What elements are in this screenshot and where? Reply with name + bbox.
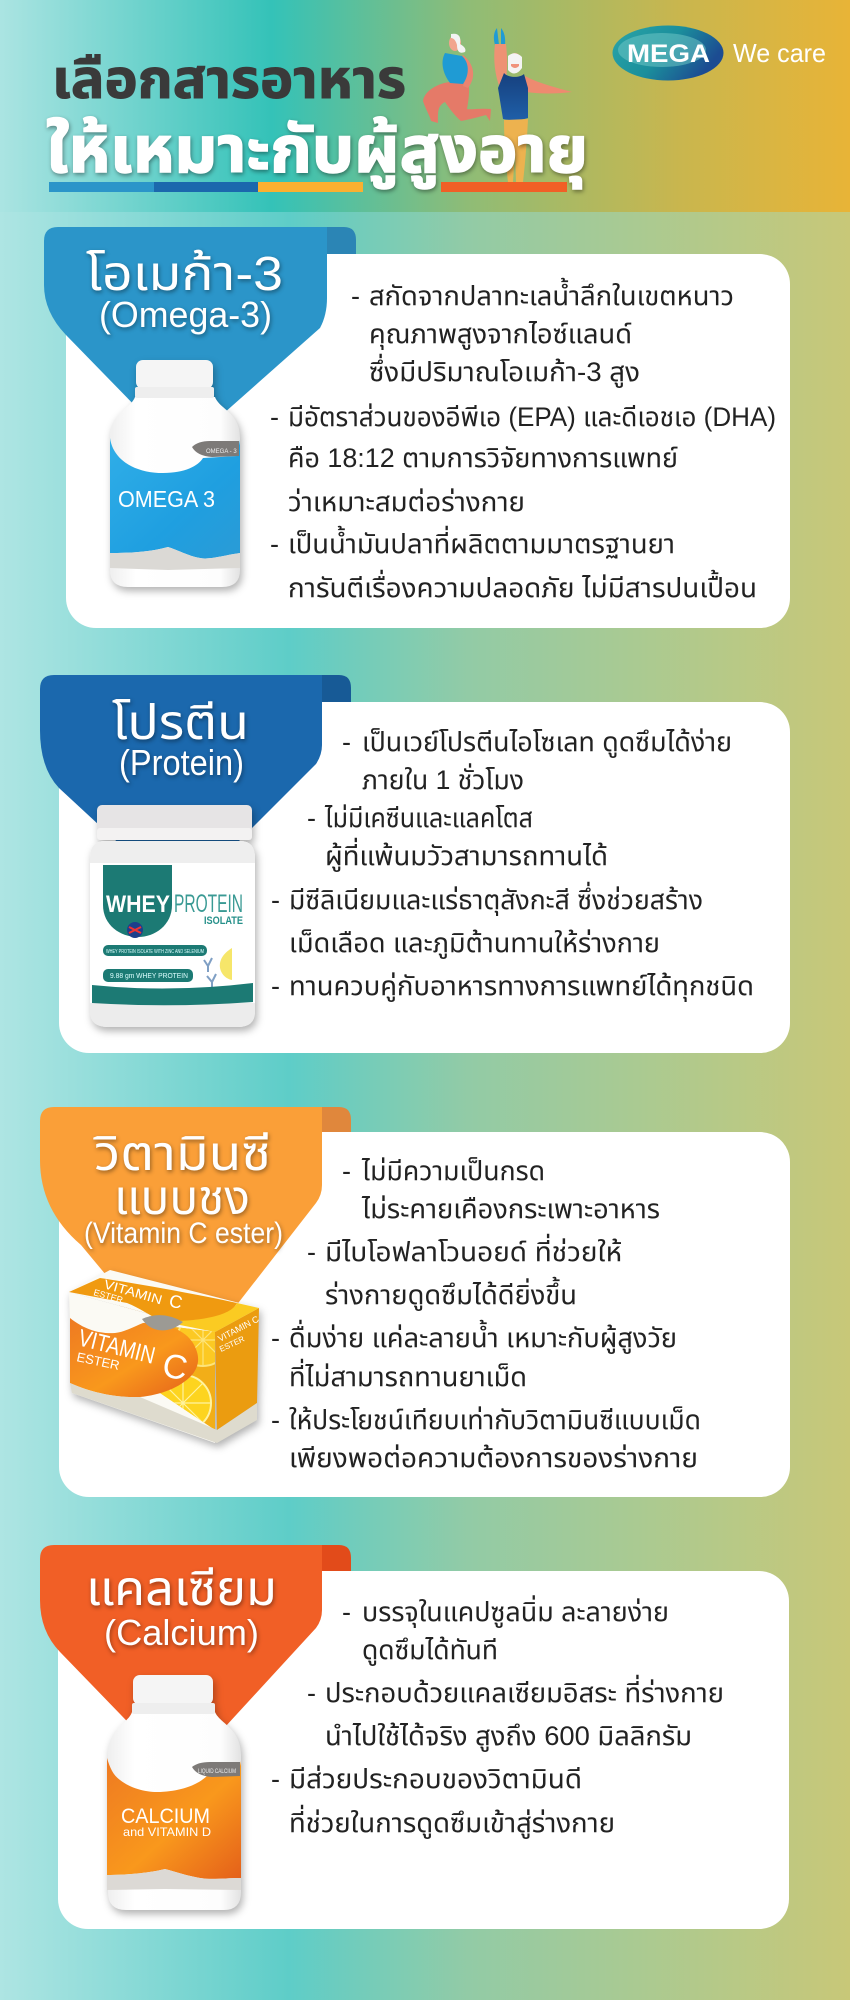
heading — [84, 1128, 283, 1250]
bullet text: ดูดซึมได้ทันที — [362, 1635, 498, 1666]
bullet text: คือ 18:12 ตามการวิจัยทางการแพทย์ — [288, 443, 678, 473]
bullet text: ประกอบด้วยแคลเซียมอิสระ ที่ร่างกาย — [325, 1674, 724, 1708]
bullet text — [271, 727, 754, 1002]
bullet text: - — [270, 529, 279, 559]
panel: protein — [40, 675, 790, 1053]
bullet text: มีส่วยประกอบของวิตามินดี — [289, 1764, 582, 1794]
product: calcium bottle — [107, 1675, 241, 1910]
product: vitamin c box: ESTER — [92, 1287, 125, 1305]
bullet text: - — [342, 1597, 351, 1627]
tab shape — [40, 1545, 322, 1776]
product: whey protein jar — [90, 805, 255, 1027]
bullet text: - — [342, 1156, 351, 1186]
bullet text: - — [307, 1237, 316, 1267]
bullet text: การันตีเรื่องความปลอดภัย ไม่มีสารปนเปื้อน — [288, 569, 757, 603]
heading: วิตามินซี — [93, 1128, 271, 1181]
bullet text: - — [271, 1764, 280, 1794]
product: whey protein jar: WHEY — [106, 891, 170, 918]
figure: man with dumbbell — [494, 28, 572, 182]
tab shape — [44, 227, 327, 452]
panel: calcium — [40, 1545, 789, 1929]
product: omega 3 bottle — [110, 360, 240, 587]
bullet text: มีไบโอฟลาโวนอยด์ ที่ช่วยให้ — [325, 1233, 622, 1267]
panel: vitamin c ester — [40, 1107, 790, 1497]
bullet text: - — [271, 1323, 280, 1353]
product: vitamin c box: C — [167, 1290, 184, 1313]
heading: (Vitamin C ester) — [84, 1217, 283, 1250]
tab shape — [40, 1107, 322, 1320]
heading: โอเมก้า-3 — [86, 248, 283, 301]
bullet text: ร่างกายดูดซึมได้ดียิ่งขึ้น — [325, 1276, 577, 1311]
logo: MEGA We care: MEGA — [627, 40, 710, 68]
heading: โปรตีน — [112, 697, 249, 750]
bullet text — [270, 277, 776, 603]
bullet text — [271, 1156, 701, 1473]
bullet text: ที่ช่วยในการดูดซึมเข้าสู่ร่างกาย — [289, 1804, 615, 1839]
product: vitamin c box: ESTER — [218, 1334, 246, 1354]
bullet text: เพียงพอต่อความต้องการของร่างกาย — [289, 1443, 698, 1473]
bullet text: ว่าเหมาะสมต่อร่างกาย — [288, 487, 525, 517]
tab shape — [40, 675, 322, 900]
card — [59, 702, 790, 1053]
heading — [86, 248, 283, 335]
bullet text: คุณภาพสูงจากไอซ์แลนด์ — [369, 319, 632, 350]
bullet text: - — [307, 803, 316, 833]
bullet text: ไม่มีเคซีนและแลคโตส — [324, 803, 533, 833]
product: whey protein jar: ISOLATE — [204, 915, 243, 927]
card — [66, 254, 790, 628]
heading: (Calcium) — [104, 1612, 259, 1653]
product: vitamin c box: VITAMIN — [102, 1276, 164, 1307]
card — [58, 1571, 789, 1929]
tab fold — [315, 1107, 351, 1132]
bullet text: - — [342, 727, 351, 757]
heading: (Omega-3) — [99, 294, 272, 335]
figure: woman lunging — [423, 34, 491, 123]
product: whey protein jar: PROTEIN — [174, 890, 243, 918]
bullet text: - — [351, 281, 360, 311]
heading: แบบชง — [114, 1172, 250, 1225]
product: omega 3 bottle: OMEGA - 3 — [206, 449, 237, 455]
bullet text: - — [271, 885, 280, 915]
panel: omega-3 — [44, 227, 790, 628]
tab fold — [315, 1545, 351, 1571]
logo: MEGA We care — [612, 26, 826, 80]
illustration: exercising seniors — [423, 28, 572, 182]
tab fold — [320, 227, 356, 254]
heading: แคลเซียม — [86, 1563, 277, 1616]
heading: (Protein) — [119, 742, 244, 783]
bullet text: ที่ไม่สามารถทานยาเม็ด — [289, 1358, 527, 1392]
product: whey protein jar: 9.88 gm WHEY PROTEIN — [110, 973, 188, 980]
bullet text: เป็นเวย์โปรตีนไอโซเลท ดูดซึมได้ง่าย — [362, 727, 732, 758]
bullet text: เป็นน้ำมันปลาที่ผลิตตามมาตรฐานยา — [288, 525, 675, 559]
bullet text — [271, 1595, 724, 1839]
bullet text: ผู้ที่แพ้นมวัวสามารถทานได้ — [325, 837, 608, 872]
title line 1: เลือกสารอาหาร — [52, 50, 406, 110]
bullet text: เม็ดเลือด และภูมิต้านทานให้ร่างกาย — [289, 928, 660, 959]
product: calcium bottle: LIQUID CALCIUM — [198, 1769, 236, 1775]
product: calcium bottle: CALCIUM — [121, 1805, 210, 1828]
bullet text: ภายใน 1 ชั่วโมง — [362, 763, 524, 795]
product: calcium bottle: and VITAMIN D — [123, 1825, 211, 1839]
bullet text: ทานควบคู่กับอาหารทางการแพทย์ได้ทุกชนิด — [289, 971, 754, 1002]
bullet text: นำไปใช้ได้จริง สูงถึง 600 มิลลิกรัม — [325, 1721, 692, 1752]
product: vitamin c box — [69, 1270, 261, 1443]
bullet text: - — [270, 402, 279, 432]
product: vitamin c box: VITAMIN — [76, 1325, 158, 1370]
title line 2: ให้เหมาะกับผู้สูงอายุ — [46, 113, 588, 189]
product: vitamin c box: VITAMIN C — [216, 1314, 261, 1344]
bullet text: ดื่มง่าย แค่ละลายน้ำ เหมาะกับผู้สูงวัย — [289, 1319, 677, 1354]
bullet text: บรรจุในแคปซูลนิ่ม ละลายง่าย — [362, 1595, 669, 1628]
bullet text: สกัดจากปลาทะเลน้ำลึกในเขตหนาว — [369, 277, 734, 311]
product: whey protein jar: WHEY PROTEIN ISOLATE WITH ZINC AND SELENIUM — [106, 949, 204, 955]
logo: MEGA We care: We care — [733, 38, 826, 68]
bullet text: ให้ประโยชน์เทียบเท่ากับวิตามินซีแบบเม็ด — [289, 1405, 701, 1435]
product: omega 3 bottle: OMEGA 3 — [118, 486, 215, 512]
product: vitamin c box: ESTER — [75, 1349, 121, 1373]
card — [59, 1132, 790, 1497]
heading — [112, 697, 249, 783]
header band — [0, 0, 850, 212]
bullet text: ซึ่งมีปริมาณโอเมก้า-3 สูง — [369, 353, 640, 388]
bullet text: มีอัตราส่วนของอีพีเอ (EPA) และดีเอชเอ (DHA) — [288, 402, 776, 432]
heading — [86, 1563, 277, 1653]
bullet text: ไม่มีความเป็นกรด — [361, 1156, 545, 1186]
bullet text: - — [307, 1678, 316, 1708]
tab fold — [315, 675, 351, 702]
bullet text: - — [271, 1405, 280, 1435]
bullet text: - — [271, 971, 280, 1001]
bullet text: มีซีลิเนียมและแร่ธาตุสังกะสี ซึ่งช่วยสร้าง — [289, 881, 703, 916]
product: vitamin c box: C — [160, 1346, 190, 1388]
colour bars under title — [49, 182, 567, 192]
bullet text: ไม่ระคายเคืองกระเพาะอาหาร — [361, 1194, 660, 1224]
